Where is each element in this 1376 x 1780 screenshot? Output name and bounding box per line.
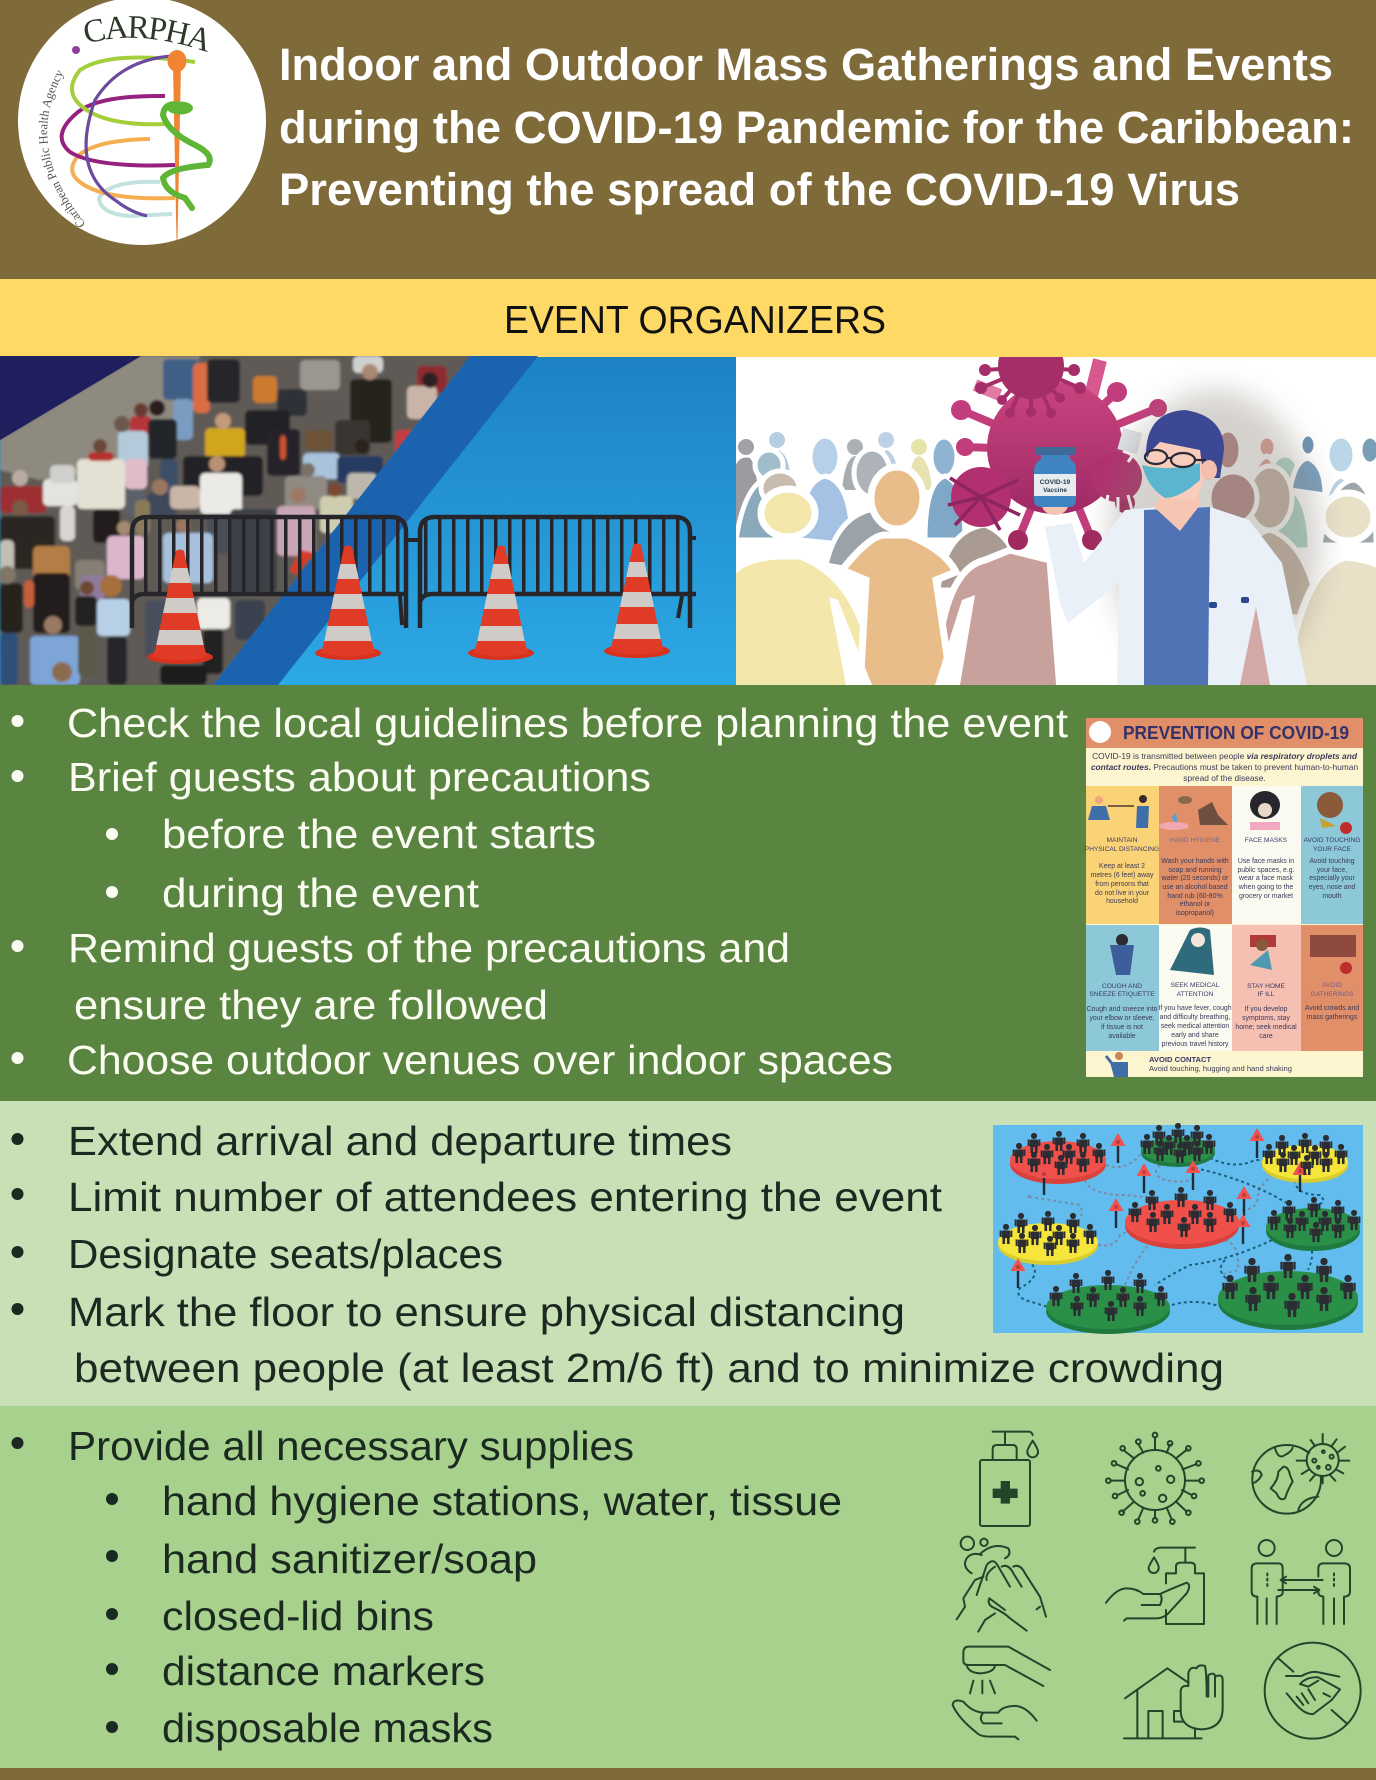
poster body text: household xyxy=(1106,898,1138,905)
title: Preventing the spread of the COVID-19 Virus xyxy=(279,164,1240,215)
panel: planning guidance (dark green): Remind guests of the precautions and xyxy=(68,925,790,971)
poster body text: available xyxy=(1108,1033,1136,1040)
image: crowd, virus and doctor with vaccine xyxy=(725,333,1376,690)
poster body text: If you develop xyxy=(1245,1006,1288,1013)
poster headings xyxy=(1085,837,1360,998)
poster body text: Cough and sneeze into xyxy=(1087,1006,1158,1013)
poster headings: ATTENTION xyxy=(1177,991,1214,998)
poster body text: eyes, nose and xyxy=(1309,884,1356,891)
logo: CARPHA: Caribbean Public Health Agency xyxy=(38,70,84,228)
poster: prevention of COVID-19: COVID-19 is transmitted between people via respiratory droplets and xyxy=(1092,751,1358,761)
poster headings: YOUR FACE xyxy=(1313,846,1352,853)
poster body text: isopropanol) xyxy=(1176,910,1214,917)
panel: supplies (mid green): disposable masks xyxy=(162,1705,493,1751)
foreground figures xyxy=(725,467,1376,690)
poster body text: early and share xyxy=(1171,1032,1219,1039)
image: crowd with barriers and cones xyxy=(0,350,736,690)
panel: distancing measures (light green) xyxy=(0,1101,1376,1406)
vaccine vial xyxy=(1034,447,1076,507)
icon: hand under tap xyxy=(953,1647,1050,1739)
poster body text: if tissue is not xyxy=(1101,1024,1143,1031)
crowd photo xyxy=(0,350,490,690)
poster body text: care xyxy=(1259,1033,1273,1040)
panel: planning guidance (dark green): during the event xyxy=(162,870,480,916)
poster body text: seek medical attention xyxy=(1161,1023,1229,1030)
bullets xyxy=(12,715,118,1064)
poster body text: from persons that xyxy=(1095,881,1149,888)
panel: supplies (mid green): hand hygiene stations, water, tissue xyxy=(162,1478,842,1524)
poster body text: mouth xyxy=(1322,893,1342,900)
poster body text: previous travel history xyxy=(1161,1041,1229,1048)
navy corner xyxy=(0,356,141,440)
panel: planning guidance (dark green): Brief guests about precautions xyxy=(68,754,651,800)
bullets xyxy=(12,1133,24,1315)
poster illustrations xyxy=(1088,791,1356,1077)
poster body text: hand rub (60-80% xyxy=(1167,893,1223,900)
poster headings: COUGH AND xyxy=(1102,983,1142,990)
poster body text: Keep at least 2 xyxy=(1099,863,1145,870)
poster body text: home; seek medical xyxy=(1235,1024,1297,1031)
panel: supplies (mid green): closed-lid bins xyxy=(162,1593,434,1639)
poster body text xyxy=(1087,858,1359,1073)
panel: planning guidance (dark green): ensure they are followed xyxy=(74,982,548,1028)
poster body text: and difficulty breathing, xyxy=(1160,1014,1230,1021)
icon: stay home xyxy=(1124,1665,1223,1738)
poster body text: Avoid touching, hugging and hand shaking xyxy=(1149,1064,1292,1073)
map: clusters of people linked by dotted paths xyxy=(993,1123,1363,1334)
poster body text: symptoms, stay xyxy=(1242,1015,1290,1022)
icon: sanitizer bottle xyxy=(980,1432,1038,1526)
poster headings: SNEEZE ETIQUETTE xyxy=(1089,991,1155,998)
vaccine vial: Vaccine xyxy=(1043,487,1067,494)
poster body text: especially your xyxy=(1309,875,1355,882)
poster headings: HAND HYGIENE xyxy=(1170,837,1221,844)
panel: distancing measures (light green): Extend arrival and departure times xyxy=(68,1118,732,1164)
poster headings: AVOID xyxy=(1322,982,1342,989)
poster body text: Avoid touching xyxy=(1309,858,1355,865)
panel: distancing measures (light green): Designate seats/places xyxy=(68,1231,503,1277)
icon: hand under soap dispenser xyxy=(1106,1548,1204,1624)
people xyxy=(1000,1123,1360,1321)
doctor shadow xyxy=(1110,390,1320,690)
poster body text: when going to the xyxy=(1238,884,1293,891)
icon grid xyxy=(953,1432,1361,1739)
poster body text: public spaces, e.g. xyxy=(1237,867,1295,874)
panel: distancing measures (light green): between people (at least 2m/6 ft) and to minimize crowding xyxy=(74,1345,1224,1391)
header band xyxy=(0,0,1376,279)
panel: distancing measures (light green): Mark the floor to ensure physical distancing xyxy=(68,1289,905,1335)
logo: CARPHA xyxy=(18,0,266,245)
poster body text: soap and running xyxy=(1168,867,1222,874)
connecting paths xyxy=(1028,1155,1270,1285)
poster headings: GATHERINGS xyxy=(1310,991,1354,998)
panel: planning guidance (dark green): Check the local guidelines before planning the event xyxy=(67,700,1069,746)
panel: supplies (mid green): Provide all necessary supplies xyxy=(68,1423,634,1469)
icon: hand washing xyxy=(957,1537,1046,1632)
virus cluster xyxy=(948,357,1167,550)
title: during the COVID-19 Pandemic for the Caribbean: xyxy=(279,102,1354,153)
traffic cones xyxy=(147,544,670,664)
panel: distancing measures (light green): Limit number of attendees entering the event xyxy=(68,1174,943,1220)
panel: supplies (mid green): hand sanitizer/soap xyxy=(162,1536,537,1582)
panel: supplies (mid green) xyxy=(0,1406,1376,1768)
poster: prevention of COVID-19: PREVENTION OF COVID-19 xyxy=(1123,722,1349,743)
poster: prevention of COVID-19 xyxy=(1085,718,1363,1077)
panel: supplies (mid green): distance markers xyxy=(162,1648,485,1694)
poster headings: AVOID TOUCHING xyxy=(1304,837,1360,844)
poster headings: FACE MASKS xyxy=(1245,837,1288,844)
panel: planning guidance (dark green) xyxy=(0,685,1376,1101)
warning signs xyxy=(1010,1128,1308,1288)
barrier right xyxy=(408,517,696,628)
icon: virus xyxy=(1106,1433,1204,1524)
poster headings: SEEK MEDICAL xyxy=(1171,982,1220,989)
title xyxy=(279,39,1354,215)
poster body text: do not live in your xyxy=(1095,890,1150,897)
poster body text: your face, xyxy=(1317,867,1347,874)
poster body text: water (20 seconds) or xyxy=(1161,875,1229,882)
poster body text: metres (6 feet) away xyxy=(1091,872,1154,879)
barrier left xyxy=(132,517,406,628)
poster headings: PHYSICAL DISTANCING xyxy=(1085,846,1159,853)
icon: globe with virus xyxy=(1252,1434,1349,1514)
icon: physical distancing xyxy=(1252,1540,1350,1624)
banner: event organizers xyxy=(0,279,1376,357)
icon: no handshake xyxy=(1265,1643,1361,1739)
footer band xyxy=(0,1768,1376,1780)
poster body text: mass gatherings xyxy=(1307,1014,1358,1021)
poster body text: Use face masks in xyxy=(1238,858,1294,865)
panel: planning guidance (dark green): before the event starts xyxy=(162,811,596,857)
poster body text: Avoid crowds and xyxy=(1305,1005,1359,1012)
poster body text: grocery or market xyxy=(1239,893,1293,900)
poster headings: IF ILL xyxy=(1258,991,1275,998)
logo: CARPHA: CARPHA xyxy=(84,16,208,52)
poster body text: wear a face mask xyxy=(1238,875,1294,882)
poster: prevention of COVID-19: spread of the disease. xyxy=(1183,773,1266,783)
doctor xyxy=(1042,410,1307,685)
poster body text: use an alcohol based xyxy=(1162,884,1228,891)
poster: prevention of COVID-19: contact routes. Precautions must be taken to prevent human-to-human xyxy=(1091,762,1358,772)
panel: planning guidance (dark green): Choose outdoor venues over indoor spaces xyxy=(67,1037,893,1083)
poster body text: your elbow or sleeve, xyxy=(1089,1015,1155,1022)
poster body text: If you have fever, cough xyxy=(1158,1005,1232,1012)
poster body text: ethanol or xyxy=(1180,901,1211,908)
poster headings: MAINTAIN xyxy=(1106,837,1138,844)
background crowd xyxy=(734,430,1376,620)
title: Indoor and Outdoor Mass Gatherings and Events xyxy=(279,39,1333,90)
poster body text: Wash your hands with xyxy=(1161,858,1229,865)
poster body text: AVOID CONTACT xyxy=(1149,1055,1212,1064)
poster headings: STAY HOME xyxy=(1247,983,1285,990)
islands xyxy=(998,1137,1360,1334)
bullets xyxy=(12,1437,118,1733)
vaccine vial: COVID-19 xyxy=(1040,479,1071,486)
banner: event organizers: EVENT ORGANIZERS xyxy=(504,299,886,342)
